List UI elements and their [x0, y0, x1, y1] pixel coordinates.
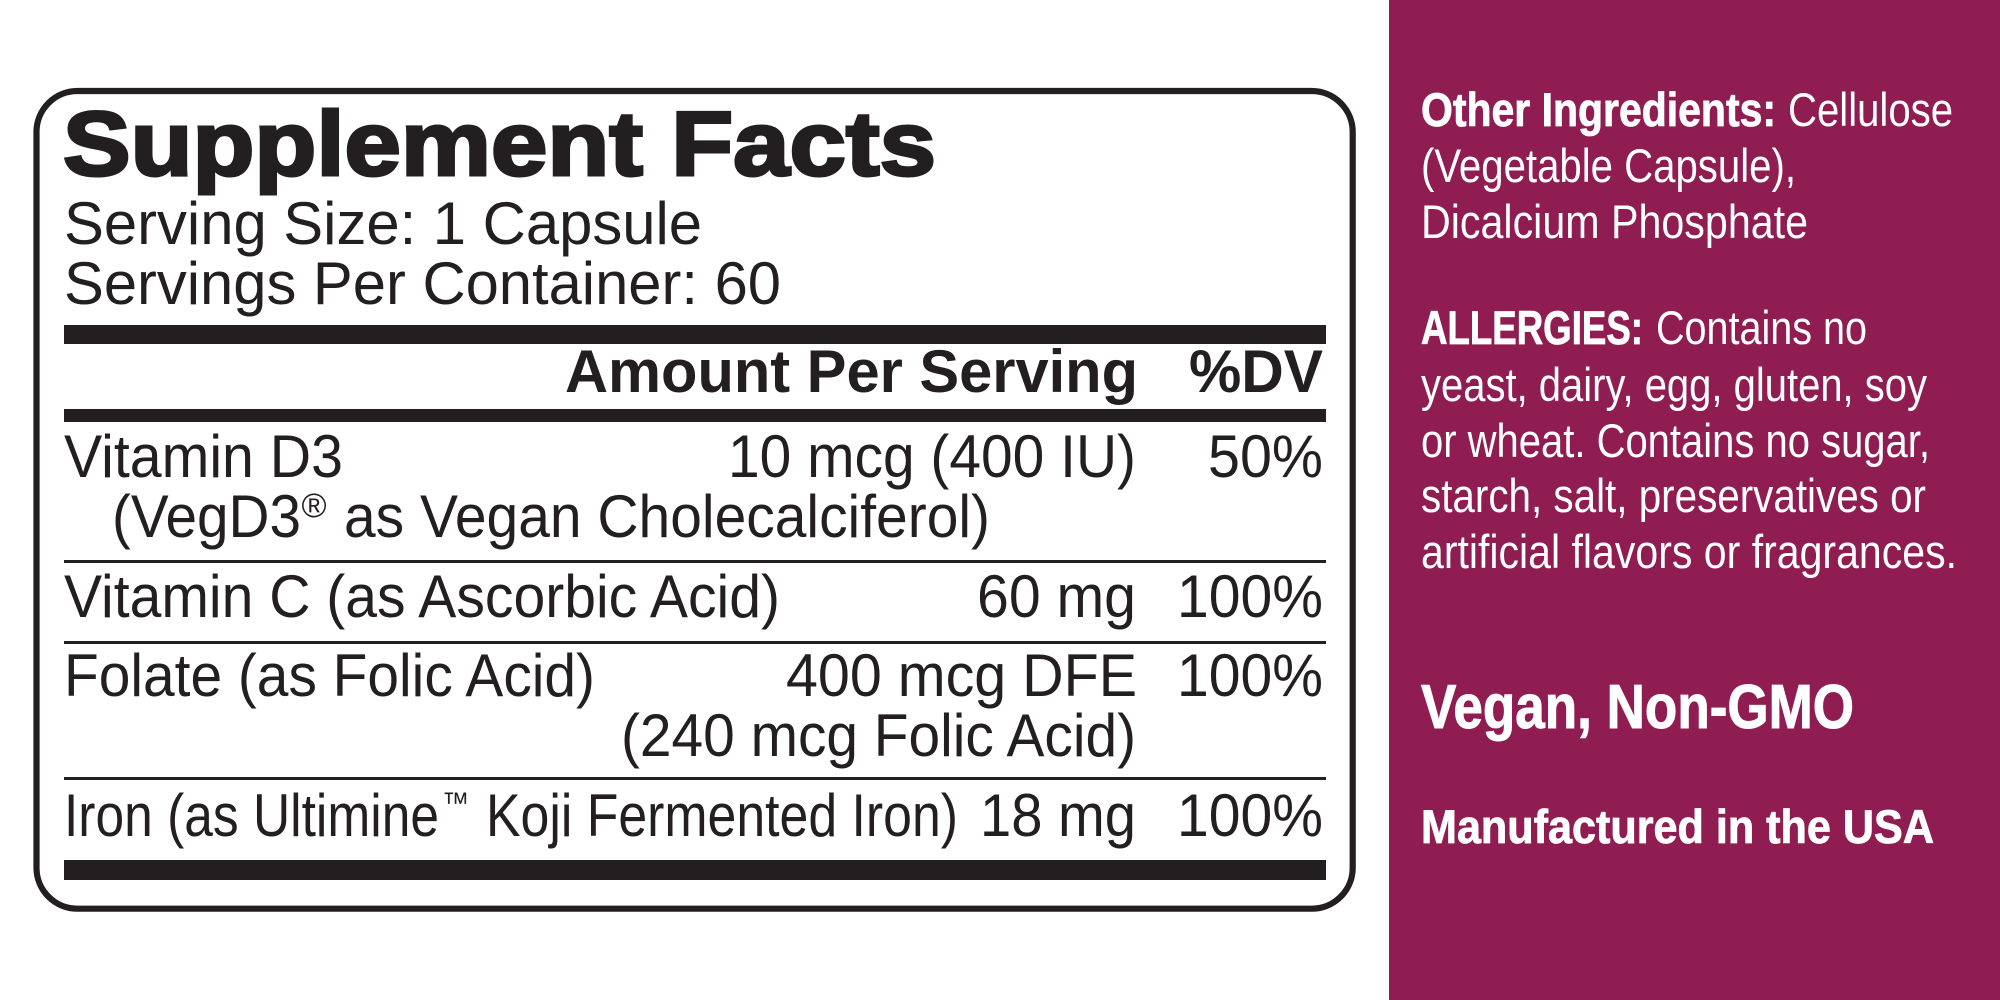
row: vitamin D3: as Vegan Cholecalciferol): [344, 483, 990, 550]
allergies text: Contains no: [1656, 301, 1867, 354]
allergies text: ALLERGIES:: [1421, 301, 1643, 354]
row: iron: [64, 782, 1323, 849]
panel: product information sidebar: [1389, 0, 2000, 1000]
row: vitamin D3: [64, 423, 1323, 550]
serving information: Servings Per Container: 60: [64, 250, 781, 317]
table header: Amount Per Serving: [565, 338, 1138, 405]
row: vitamin C: Vitamin C (as Ascorbic Acid): [64, 563, 780, 630]
row: vitamin D3: ®: [302, 487, 327, 525]
row: iron: 100%: [1177, 782, 1323, 849]
vegan, non-GMO claim: Vegan, Non-GMO: [1421, 673, 1854, 742]
allergies text: starch, salt, preservatives or: [1421, 469, 1926, 522]
serving information: [64, 190, 781, 317]
row: folate: 100%: [1177, 642, 1323, 709]
other ingredients text: [1421, 83, 1953, 248]
row: vitamin D3: 10 mcg (400 IU): [728, 423, 1136, 490]
other ingredients text: Cellulose: [1788, 83, 1953, 136]
row: vitamin C: 60 mg: [977, 563, 1136, 630]
row: iron: ™: [442, 787, 469, 820]
other ingredients text: Dicalcium Phosphate: [1421, 195, 1808, 248]
row: folate: [64, 642, 1323, 769]
row: iron: Koji Fermented Iron): [486, 782, 958, 849]
allergies text: [1421, 301, 1957, 578]
row: folate: 400 mcg DFE: [786, 642, 1137, 709]
row: iron: Iron (as Ultimine: [64, 782, 439, 849]
row: folate: (240 mcg Folic Acid): [621, 702, 1136, 769]
row: folate: Folate (as Folic Acid): [64, 642, 595, 709]
row: vitamin C: 100%: [1177, 563, 1323, 630]
other ingredients text: Other Ingredients:: [1421, 83, 1776, 136]
manufactured in the USA claim: Manufactured in the USA: [1421, 800, 1934, 853]
row: vitamin D3: Vitamin D3: [64, 423, 343, 490]
serving information: Serving Size: 1 Capsule: [64, 190, 702, 257]
title: Supplement Facts: [63, 94, 936, 195]
allergies text: yeast, dairy, egg, gluten, soy: [1421, 358, 1927, 411]
row: vitamin C: [64, 563, 1323, 630]
panel: supplement facts label: [36, 91, 1353, 909]
row: iron: 18 mg: [980, 782, 1136, 849]
row: vitamin D3: 50%: [1208, 423, 1323, 490]
table header: %DV: [1189, 338, 1323, 405]
other ingredients text: (Vegetable Capsule),: [1421, 139, 1796, 192]
row: vitamin D3: (VegD3: [112, 483, 301, 550]
